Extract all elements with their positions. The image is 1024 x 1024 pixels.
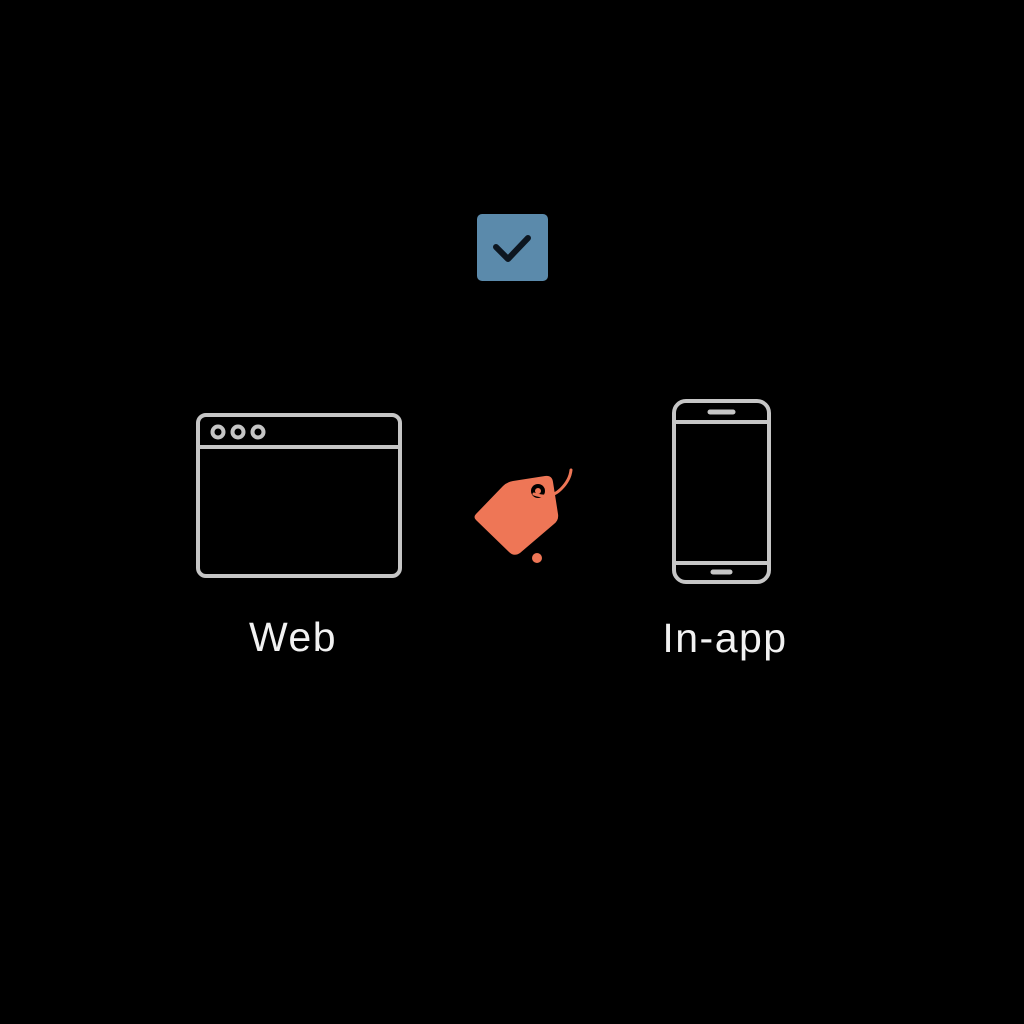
icon: smartphone	[674, 401, 769, 582]
label: In-app: In-app	[662, 615, 788, 661]
icon: checkbox	[477, 214, 548, 281]
icon: price tag	[474, 470, 571, 563]
icon: browser window	[198, 415, 400, 576]
label: Web: Web	[249, 614, 337, 660]
